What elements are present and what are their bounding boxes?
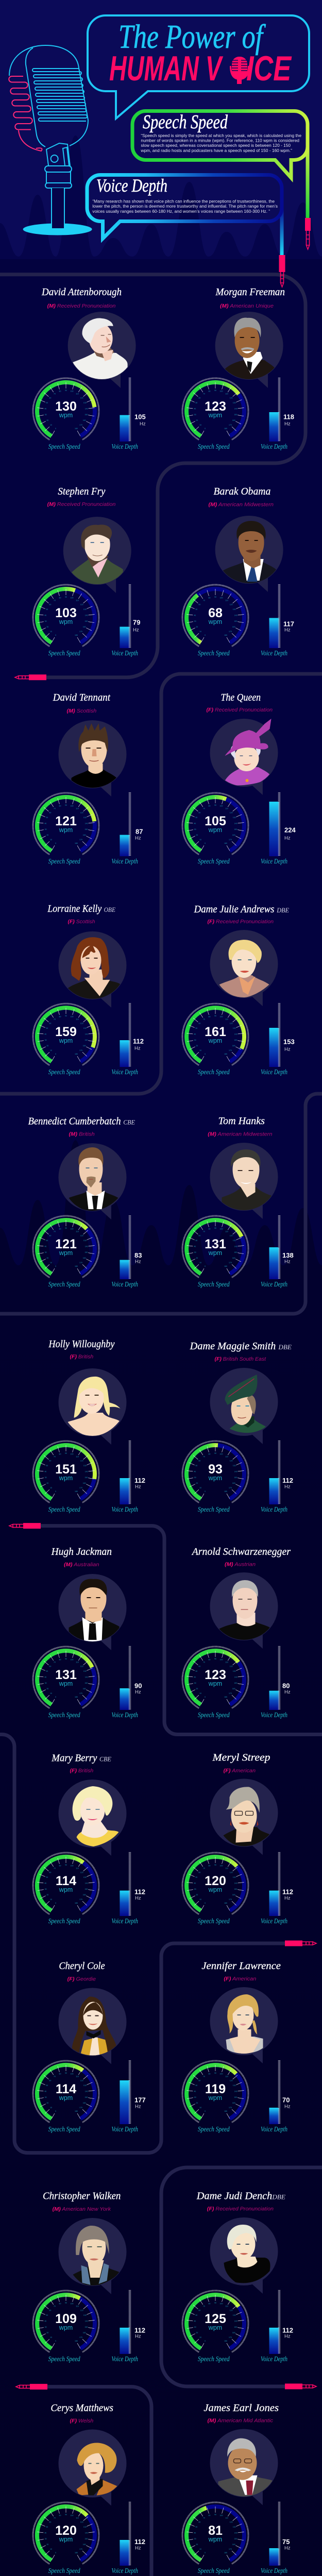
voice depth: Voice Depth xyxy=(111,2125,138,2133)
voice depth xyxy=(111,1646,142,1719)
speed gauge: wpm xyxy=(59,1249,73,1257)
portrait xyxy=(59,1368,127,1445)
speed gauge: 123 xyxy=(205,399,226,414)
portrait xyxy=(210,1368,278,1444)
speed gauge: Speech Speed xyxy=(48,1917,80,1925)
speed gauge: wpm xyxy=(208,618,222,625)
speed gauge xyxy=(182,1216,248,1288)
speed gauge: Speech Speed xyxy=(198,1280,230,1288)
speed gauge xyxy=(33,2061,99,2133)
name: Arnold Schwarzenegger xyxy=(191,1546,291,1557)
speed gauge: wpm xyxy=(59,618,73,625)
voice depth xyxy=(261,2290,293,2363)
title: The Power of xyxy=(118,18,266,56)
voice depth: Voice Depth xyxy=(111,1068,138,1076)
card: Bennedict Cumberbatch xyxy=(28,1116,142,1288)
voice depth xyxy=(261,2502,291,2574)
voice depth: 112 xyxy=(282,2327,293,2334)
portrait xyxy=(210,1778,278,1855)
speed gauge: wpm xyxy=(208,826,222,834)
speed gauge: 125 xyxy=(205,2312,226,2326)
name: Hugh Jackman xyxy=(51,1546,112,1557)
speed gauge: 131 xyxy=(205,1237,226,1251)
voice depth xyxy=(111,1003,144,1076)
voice depth: Hz xyxy=(135,1895,141,1901)
heading: Speech Speed xyxy=(143,111,228,133)
voice depth: 224 xyxy=(284,826,296,834)
speed gauge: Speech Speed xyxy=(198,443,230,450)
card: Morgan Freeman xyxy=(182,286,294,450)
title: ICE xyxy=(246,49,292,88)
speed gauge: wpm xyxy=(208,1886,222,1893)
speed gauge xyxy=(182,2061,248,2133)
speed gauge: 114 xyxy=(56,1874,76,1888)
accent: (F) Received Pronunciation xyxy=(206,707,273,713)
voice depth xyxy=(261,1215,294,1288)
voice depth: Voice Depth xyxy=(111,443,138,450)
card: Meryl Streep xyxy=(182,1752,293,1925)
accent: (F) American xyxy=(224,1768,256,1774)
accent: (F) Scottish xyxy=(68,919,95,925)
voice depth xyxy=(111,2502,145,2574)
accent: (F) Received Pronunciation xyxy=(207,2206,274,2212)
speed gauge xyxy=(33,793,99,865)
voice depth: Voice Depth xyxy=(261,2355,287,2363)
speed gauge: wpm xyxy=(208,1249,222,1257)
speed gauge: Speech Speed xyxy=(198,1917,230,1925)
text: voices usually ranges between 60-180 Hz, and women’s voices range between 160-300 Hz. ” xyxy=(92,209,270,214)
voice depth: Voice Depth xyxy=(111,1917,138,1925)
panel: voice depth xyxy=(87,175,282,239)
speed gauge: Speech Speed xyxy=(198,2355,230,2363)
voice depth: Hz xyxy=(135,2545,141,2551)
accent: (M) Received Pronunciation xyxy=(47,303,116,309)
voice depth: 75 xyxy=(282,2538,290,2546)
text: wpm, and radio hosts and podcasters have a speech speed of 150 - 160 wpm.” xyxy=(140,148,292,153)
accent: (M) American Unique xyxy=(220,303,274,309)
name: David Tennant xyxy=(53,692,110,703)
speed gauge: wpm xyxy=(208,1680,222,1687)
accent: (F) American xyxy=(224,1976,257,1982)
speed gauge: Speech Speed xyxy=(198,649,230,657)
card: Cerys Matthews xyxy=(33,2402,145,2574)
card: David Attenborough xyxy=(33,286,146,450)
background: header band xyxy=(0,0,322,258)
voice depth: Voice Depth xyxy=(261,2125,287,2133)
voice depth xyxy=(111,584,140,657)
voice depth xyxy=(111,378,146,450)
voice depth: Voice Depth xyxy=(261,857,287,865)
voice depth xyxy=(261,2060,291,2133)
title bubble xyxy=(88,15,309,118)
portrait xyxy=(59,2218,127,2294)
voice depth xyxy=(261,1646,291,1719)
jack: speech speed xyxy=(305,218,311,249)
speed gauge xyxy=(182,1004,248,1076)
voice depth xyxy=(111,2060,146,2133)
portrait xyxy=(59,2430,127,2506)
speed gauge: wpm xyxy=(59,826,73,834)
panel: speech speed xyxy=(132,111,308,178)
speed gauge: 120 xyxy=(55,2523,77,2538)
speed gauge: Speech Speed xyxy=(48,1711,80,1719)
speed gauge: Speech Speed xyxy=(48,1505,80,1513)
card: Christopher Walken xyxy=(33,2190,145,2363)
portrait xyxy=(59,1574,127,1650)
text xyxy=(140,133,301,153)
accent: (F) Welsh xyxy=(70,2418,93,2424)
speed gauge: 81 xyxy=(208,2523,223,2538)
speed gauge xyxy=(33,1216,99,1288)
voice depth: Hz xyxy=(284,1047,291,1052)
voice depth: Hz xyxy=(140,421,146,427)
accent: (M) British xyxy=(69,1131,95,1137)
voice depth: 138 xyxy=(282,1251,294,1259)
speed gauge xyxy=(182,793,248,865)
voice depth: Hz xyxy=(284,421,291,427)
voice depth: Hz xyxy=(284,1484,291,1490)
speed gauge: wpm xyxy=(208,2324,222,2331)
card: Hugh Jackman xyxy=(33,1546,142,1719)
name: Meryl Streep xyxy=(212,1752,270,1763)
accent: (M) Australian xyxy=(64,1562,99,1568)
card: Dame Maggie Smith xyxy=(182,1341,293,1513)
voice depth: Hz xyxy=(284,2334,291,2339)
name: James Earl Jones xyxy=(204,2402,279,2414)
speed gauge xyxy=(33,378,99,450)
accent: (M) American New York xyxy=(53,2206,111,2212)
accent: (M) American Midwestern xyxy=(208,502,274,508)
name: Christopher Walken xyxy=(43,2190,121,2201)
cable: speech bubble xyxy=(306,147,309,218)
voice depth: Voice Depth xyxy=(111,1280,138,1288)
speed gauge xyxy=(182,1441,248,1513)
accent: (M) Scottish xyxy=(67,708,96,714)
voice depth: Hz xyxy=(284,836,291,841)
voice depth: 87 xyxy=(135,827,143,836)
voice depth xyxy=(261,1852,293,1925)
speed gauge: Speech Speed xyxy=(48,857,80,865)
voice depth: Voice Depth xyxy=(111,2355,138,2363)
accent: (M) American Mid Atlantic xyxy=(207,2417,274,2424)
speed gauge: 119 xyxy=(205,2082,226,2096)
card: Dame Julie Andrews xyxy=(182,904,295,1076)
text: slow speech speed, whereas coversational speech speed is between 120 - 150 xyxy=(141,143,291,148)
name: Bennedict Cumberbatch CBE xyxy=(28,1116,135,1127)
speed gauge: 131 xyxy=(55,1668,77,1682)
name: Morgan Freeman xyxy=(215,286,285,298)
voice depth: Voice Depth xyxy=(261,1280,287,1288)
voice depth xyxy=(111,1215,142,1288)
speed gauge xyxy=(33,2291,99,2363)
speed gauge: wpm xyxy=(59,2536,73,2543)
card: Holly Willoughby xyxy=(33,1338,145,1513)
microphone xyxy=(9,45,92,235)
speed gauge xyxy=(182,2291,248,2363)
speed gauge: 114 xyxy=(56,2082,76,2096)
text: number of words spoken in a minute (wpm). For reference, 110 wpm is considered xyxy=(141,138,299,143)
voice depth: Hz xyxy=(135,2334,141,2339)
speed gauge: Speech Speed xyxy=(198,1505,230,1513)
speed gauge: wpm xyxy=(59,2324,73,2331)
voice depth: 112 xyxy=(134,1888,145,1896)
voice depth: 112 xyxy=(282,1477,293,1484)
voice depth: 112 xyxy=(134,2538,145,2546)
name: Tom Hanks xyxy=(218,1115,265,1127)
speed gauge: wpm xyxy=(208,2536,222,2543)
speed gauge xyxy=(182,2502,248,2574)
text xyxy=(92,199,278,214)
speed gauge: 161 xyxy=(205,1025,226,1039)
name: Cerys Matthews xyxy=(50,2402,113,2414)
voice depth: Voice Depth xyxy=(111,649,138,657)
name: Lorraine Kelly OBE xyxy=(47,903,115,914)
speed gauge: 105 xyxy=(205,814,226,828)
portrait xyxy=(210,1572,278,1649)
accent: (M) Received Pronunciation xyxy=(47,501,116,507)
voice depth: Hz xyxy=(135,836,141,841)
voice depth: 153 xyxy=(283,1038,295,1046)
portrait xyxy=(59,1143,127,1219)
card: David Tennant xyxy=(33,692,143,865)
voice depth: Hz xyxy=(135,1259,141,1264)
voice depth: Hz xyxy=(135,1689,141,1695)
card: The Queen xyxy=(182,692,296,865)
voice depth: 90 xyxy=(134,1682,142,1690)
speed gauge: Speech Speed xyxy=(48,1280,80,1288)
speed gauge: 151 xyxy=(55,1462,77,1477)
voice depth xyxy=(261,1440,293,1513)
voice depth xyxy=(261,792,296,865)
accent: (M) Austrian xyxy=(225,1561,256,1567)
card: Cheryl Cole xyxy=(33,1960,146,2133)
name: The Queen xyxy=(221,692,261,703)
speed gauge: Speech Speed xyxy=(198,857,230,865)
voice depth: Voice Depth xyxy=(261,1505,287,1513)
name: Dame Julie Andrews DBE xyxy=(194,904,289,915)
voice depth: 177 xyxy=(134,2096,146,2104)
card: Mary Berry xyxy=(33,1752,145,1925)
portrait xyxy=(210,2217,278,2294)
portrait xyxy=(59,1988,127,2064)
voice depth: 118 xyxy=(283,413,294,420)
speed gauge: 93 xyxy=(208,1462,223,1477)
speed gauge: wpm xyxy=(208,1475,222,1482)
voice depth: 70 xyxy=(282,2096,290,2104)
voice depth: Hz xyxy=(284,1689,291,1695)
name: Dame Maggie Smith DBE xyxy=(190,1341,292,1352)
speed gauge xyxy=(33,2502,99,2574)
text: “Speech speed is simply the speed at which you speak, which is calculated using the xyxy=(141,133,301,138)
name: Cheryl Cole xyxy=(59,1960,105,1972)
speed gauge xyxy=(33,585,99,657)
voice depth: 112 xyxy=(133,1038,144,1045)
portrait xyxy=(210,1143,278,1219)
speed gauge: 109 xyxy=(55,2312,77,2326)
speed gauge: 103 xyxy=(55,606,77,620)
speed gauge: 130 xyxy=(55,399,77,414)
speed gauge: Speech Speed xyxy=(48,1068,80,1076)
speed gauge xyxy=(33,1004,99,1076)
speed gauge xyxy=(182,378,248,450)
voice depth xyxy=(111,1852,145,1925)
voice depth: Hz xyxy=(284,2545,291,2551)
name: Mary Berry CBE xyxy=(51,1752,111,1764)
portrait xyxy=(215,312,283,388)
speed gauge: Speech Speed xyxy=(48,649,80,657)
name: Barak Obama xyxy=(213,486,270,497)
voice depth xyxy=(111,2290,145,2363)
voice depth: 112 xyxy=(134,2327,145,2334)
voice depth: 80 xyxy=(282,1682,290,1690)
card: Dame Judi Dench xyxy=(182,2190,293,2363)
portrait xyxy=(59,720,127,796)
voice depth: Voice Depth xyxy=(261,1068,287,1076)
speed gauge: wpm xyxy=(59,2094,73,2102)
voice depth: 105 xyxy=(134,413,146,420)
name: Dame Judi DenchDBE xyxy=(196,2190,285,2201)
background: upper section xyxy=(0,258,322,1265)
card: Lorraine Kelly xyxy=(33,903,144,1076)
voice depth: 83 xyxy=(134,1251,142,1259)
speed gauge xyxy=(33,1441,99,1513)
speed gauge: Speech Speed xyxy=(198,2567,230,2574)
accent: (M) American Midwestern xyxy=(208,1131,273,1137)
speed gauge xyxy=(182,1647,248,1719)
voice depth: Voice Depth xyxy=(261,2567,287,2574)
card: James Earl Jones xyxy=(182,2402,291,2574)
voice depth xyxy=(261,1003,295,1076)
portrait xyxy=(210,1987,278,2063)
name: Stephen Fry xyxy=(58,486,106,497)
speed gauge: Speech Speed xyxy=(198,2125,230,2133)
voice depth: Voice Depth xyxy=(261,443,287,450)
card: Tom Hanks xyxy=(182,1115,294,1288)
voice depth: Voice Depth xyxy=(111,1505,138,1513)
voice depth xyxy=(111,792,143,865)
speed gauge: wpm xyxy=(208,1037,222,1044)
name: Holly Willoughby xyxy=(48,1338,115,1350)
speed gauge: 120 xyxy=(205,1874,226,1888)
speed gauge: wpm xyxy=(59,1886,73,1893)
speed gauge xyxy=(33,1853,99,1925)
voice depth xyxy=(111,1440,145,1513)
name: Jennifer Lawrence xyxy=(201,1960,281,1972)
voice depth: Hz xyxy=(135,1484,141,1490)
title xyxy=(109,18,292,88)
portrait xyxy=(210,930,278,1006)
speed gauge: wpm xyxy=(59,412,73,419)
jack plugs xyxy=(9,674,316,2389)
portrait xyxy=(63,517,131,593)
voice depth: Voice Depth xyxy=(111,2567,138,2574)
voice depth: 79 xyxy=(133,618,140,626)
accent: (F) British South East xyxy=(214,1356,266,1362)
jack: voice depth xyxy=(279,255,285,287)
voice depth: 117 xyxy=(283,620,294,628)
voice depth: Hz xyxy=(135,2104,141,2109)
speed gauge: wpm xyxy=(59,1037,73,1044)
speed gauge: 123 xyxy=(205,1668,226,1682)
accent: (F) British xyxy=(70,1354,93,1360)
voice depth: Hz xyxy=(134,1046,141,1051)
voice depth xyxy=(261,584,294,657)
voice depth: Voice Depth xyxy=(111,857,138,865)
voice depth: 112 xyxy=(134,1477,145,1484)
waveform: header xyxy=(0,135,322,259)
speed gauge: wpm xyxy=(208,412,222,419)
heading: Voice Depth xyxy=(96,175,167,196)
portrait xyxy=(210,2429,278,2505)
portrait xyxy=(215,516,283,592)
speed gauge: wpm xyxy=(59,1680,73,1687)
voice depth: Hz xyxy=(284,628,291,633)
voice depth: Hz xyxy=(284,1259,291,1264)
voice depth: Hz xyxy=(284,2104,291,2109)
background: lower section xyxy=(0,1265,322,2576)
voice depth xyxy=(261,378,294,450)
speed gauge: 121 xyxy=(55,1237,77,1251)
title: HUMAN V xyxy=(109,49,224,88)
voice depth: Voice Depth xyxy=(261,1917,287,1925)
portrait xyxy=(210,719,278,795)
accent: (F) British xyxy=(70,1768,93,1774)
waveform: middle xyxy=(0,1140,322,1267)
speed gauge: wpm xyxy=(208,2094,222,2102)
speed gauge: 68 xyxy=(208,606,223,620)
accent: (F) Geordie xyxy=(67,1976,96,1982)
card: Arnold Schwarzenegger xyxy=(182,1546,291,1719)
portrait xyxy=(59,1780,127,1856)
speed gauge: 159 xyxy=(55,1025,77,1039)
voice depth: 112 xyxy=(282,1888,293,1896)
speed gauge: Speech Speed xyxy=(48,2355,80,2363)
text: lower the pitch, the person is deemed more trustworthy and influential. The pitch range for men’s xyxy=(92,204,278,209)
speed gauge: Speech Speed xyxy=(48,443,80,450)
speed gauge: Speech Speed xyxy=(48,2125,80,2133)
voice depth: Hz xyxy=(284,1895,291,1901)
card: Jennifer Lawrence xyxy=(182,1960,291,2133)
text: “Many research has shown that voice pitch can influence the perceptions of trustworthiness, the xyxy=(92,199,275,204)
cable: voice bubble xyxy=(280,208,283,255)
speed gauge: wpm xyxy=(59,1475,73,1482)
portrait xyxy=(68,312,136,388)
speed gauge xyxy=(182,1853,248,1925)
speed gauge: Speech Speed xyxy=(198,1711,230,1719)
card: Stephen Fry xyxy=(33,486,140,657)
portrait xyxy=(59,931,127,1008)
voice depth: Voice Depth xyxy=(261,1711,287,1719)
voice depth: Voice Depth xyxy=(261,649,287,657)
voice depth: Voice Depth xyxy=(111,1711,138,1719)
speed gauge xyxy=(182,585,248,657)
speed gauge: Speech Speed xyxy=(198,1068,230,1076)
voice depth: Hz xyxy=(133,628,139,633)
card: Barak Obama xyxy=(182,486,294,657)
accent: (F) Received Pronunciation xyxy=(207,919,274,925)
speed gauge: Speech Speed xyxy=(48,2567,80,2574)
name: David Attenborough xyxy=(41,286,122,298)
speed gauge xyxy=(33,1647,99,1719)
speed gauge: 121 xyxy=(55,814,77,828)
